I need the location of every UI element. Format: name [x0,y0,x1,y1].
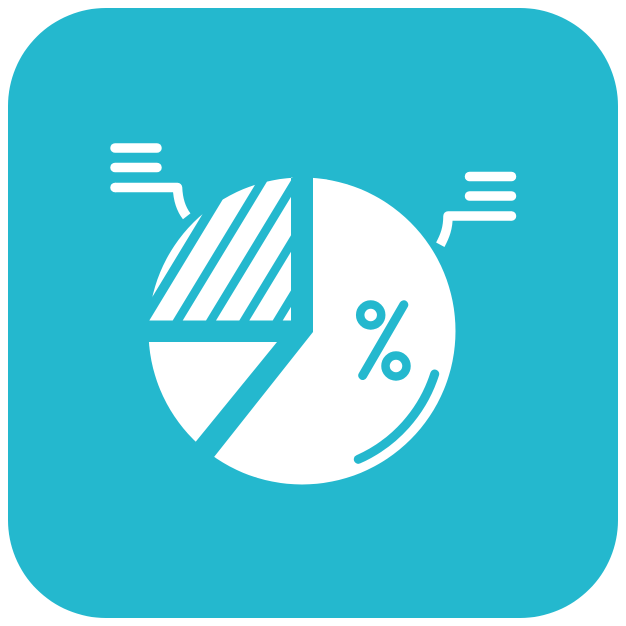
arc highlight [358,374,435,459]
callout: left label lines [110,148,187,216]
pie chart [148,178,456,484]
slice: large right segment [214,178,456,484]
slice: hatched upper left segment [149,178,293,320]
callout: right label lines [440,176,516,245]
percent sign [360,304,406,376]
slice: lower left segment [148,342,277,442]
